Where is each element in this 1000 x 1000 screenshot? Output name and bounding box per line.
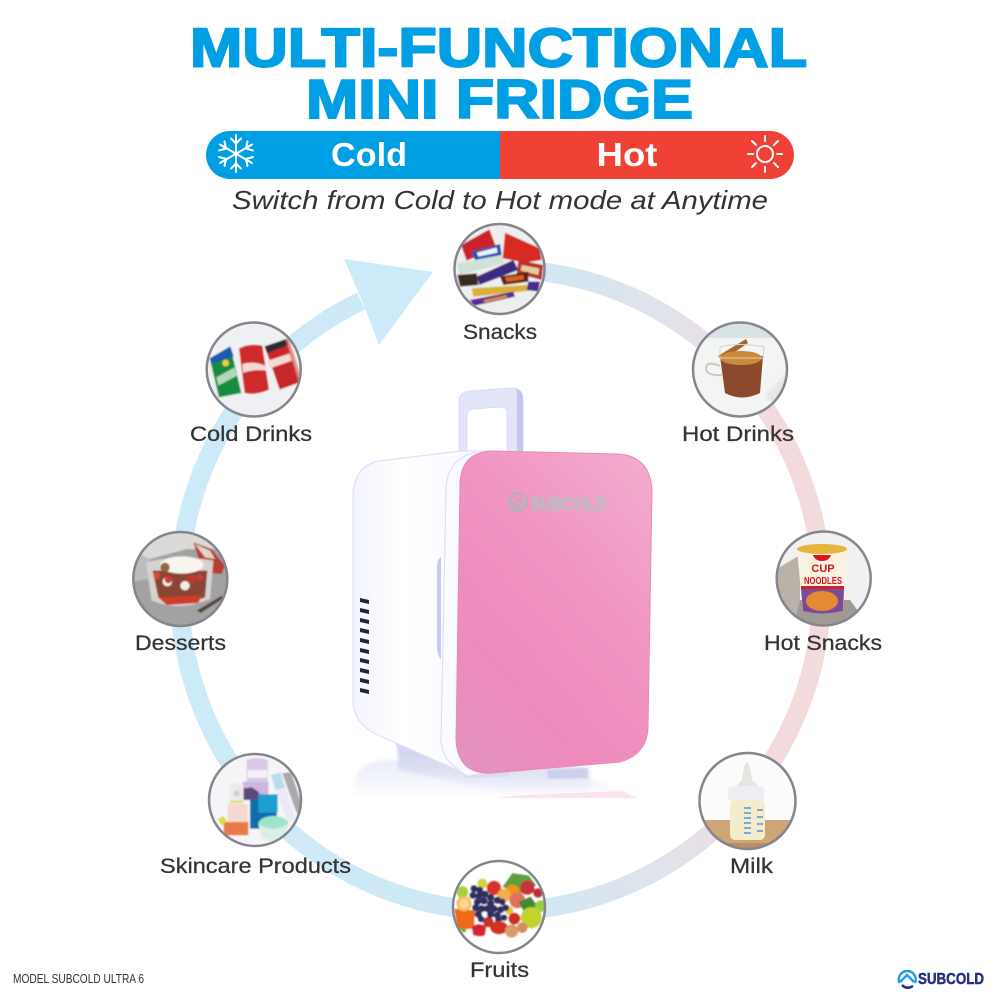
handle [459, 388, 523, 452]
hot half of bar [500, 131, 794, 179]
door logo [509, 493, 606, 514]
item: fruits [452, 860, 546, 978]
brand logo [899, 971, 984, 988]
cold label: Cold [331, 136, 407, 173]
label: Hot Drinks [682, 423, 794, 446]
item: hot snacks [764, 530, 882, 655]
label: Hot Snacks [764, 632, 882, 655]
item: cold drinks [190, 319, 312, 446]
item: desserts [130, 529, 230, 655]
item: hot drinks [682, 320, 794, 446]
title: MINI FRIDGE [306, 68, 693, 130]
icon: glass of hot drink photo [694, 324, 786, 415]
icon: brand mountain circle [899, 971, 916, 988]
label: Skincare Products [160, 855, 351, 878]
title: MULTI-FUNCTIONAL [190, 16, 807, 78]
item: milk [698, 752, 797, 874]
icon: instant noodles cup photo [778, 532, 870, 624]
hot label: Hot [596, 136, 658, 173]
feet [395, 743, 588, 779]
circle border [209, 754, 301, 846]
icon: snacks photo [456, 226, 544, 312]
body [353, 451, 500, 776]
arrowhead [344, 259, 433, 345]
circle border [453, 861, 545, 953]
icon: soda cans photo [208, 324, 300, 415]
label: Cold Drinks [190, 423, 312, 446]
under-fridge shadow [398, 748, 590, 792]
label: Snacks [463, 321, 537, 344]
subtitle: Switch from Cold to Hot mode at Anytime [232, 185, 768, 215]
label: Fruits [470, 959, 529, 982]
title [190, 16, 807, 130]
door frame line [441, 452, 477, 770]
icon: sun [748, 136, 782, 172]
brand name: SUBCOLD [918, 971, 984, 988]
icon: instant noodles cup photo: NOODLES [804, 576, 842, 587]
cold and hot mode bar [206, 131, 794, 179]
fridge [353, 388, 652, 798]
floor reflection [353, 760, 637, 798]
side vents [360, 598, 369, 694]
icon: fruit pile photo [454, 872, 544, 938]
pink reflection [497, 791, 637, 798]
circle border [700, 753, 796, 849]
item: skincare products [160, 750, 351, 878]
label: Desserts [135, 632, 226, 655]
icon: dessert bowl photo [134, 533, 226, 625]
item: snacks [453, 222, 546, 340]
circle border [693, 322, 787, 416]
circle border [207, 322, 301, 416]
ring path [180, 272, 822, 911]
pink door [456, 451, 652, 773]
circle border [133, 532, 227, 626]
label: Milk [730, 855, 774, 878]
icon: baby bottle photo [704, 757, 790, 848]
cold half of bar [206, 131, 500, 179]
circle border [777, 532, 871, 626]
icon: snowflake [219, 135, 253, 172]
model name: MODEL SUBCOLD ULTRA 6 [13, 972, 144, 986]
icon: instant noodles cup photo: CUP [811, 563, 835, 575]
icon: skincare products photo [210, 756, 300, 844]
circular cycle arrow [180, 259, 822, 911]
door logo: SUBCOLD [531, 494, 606, 514]
circle border [454, 224, 544, 314]
side recess [437, 557, 441, 659]
